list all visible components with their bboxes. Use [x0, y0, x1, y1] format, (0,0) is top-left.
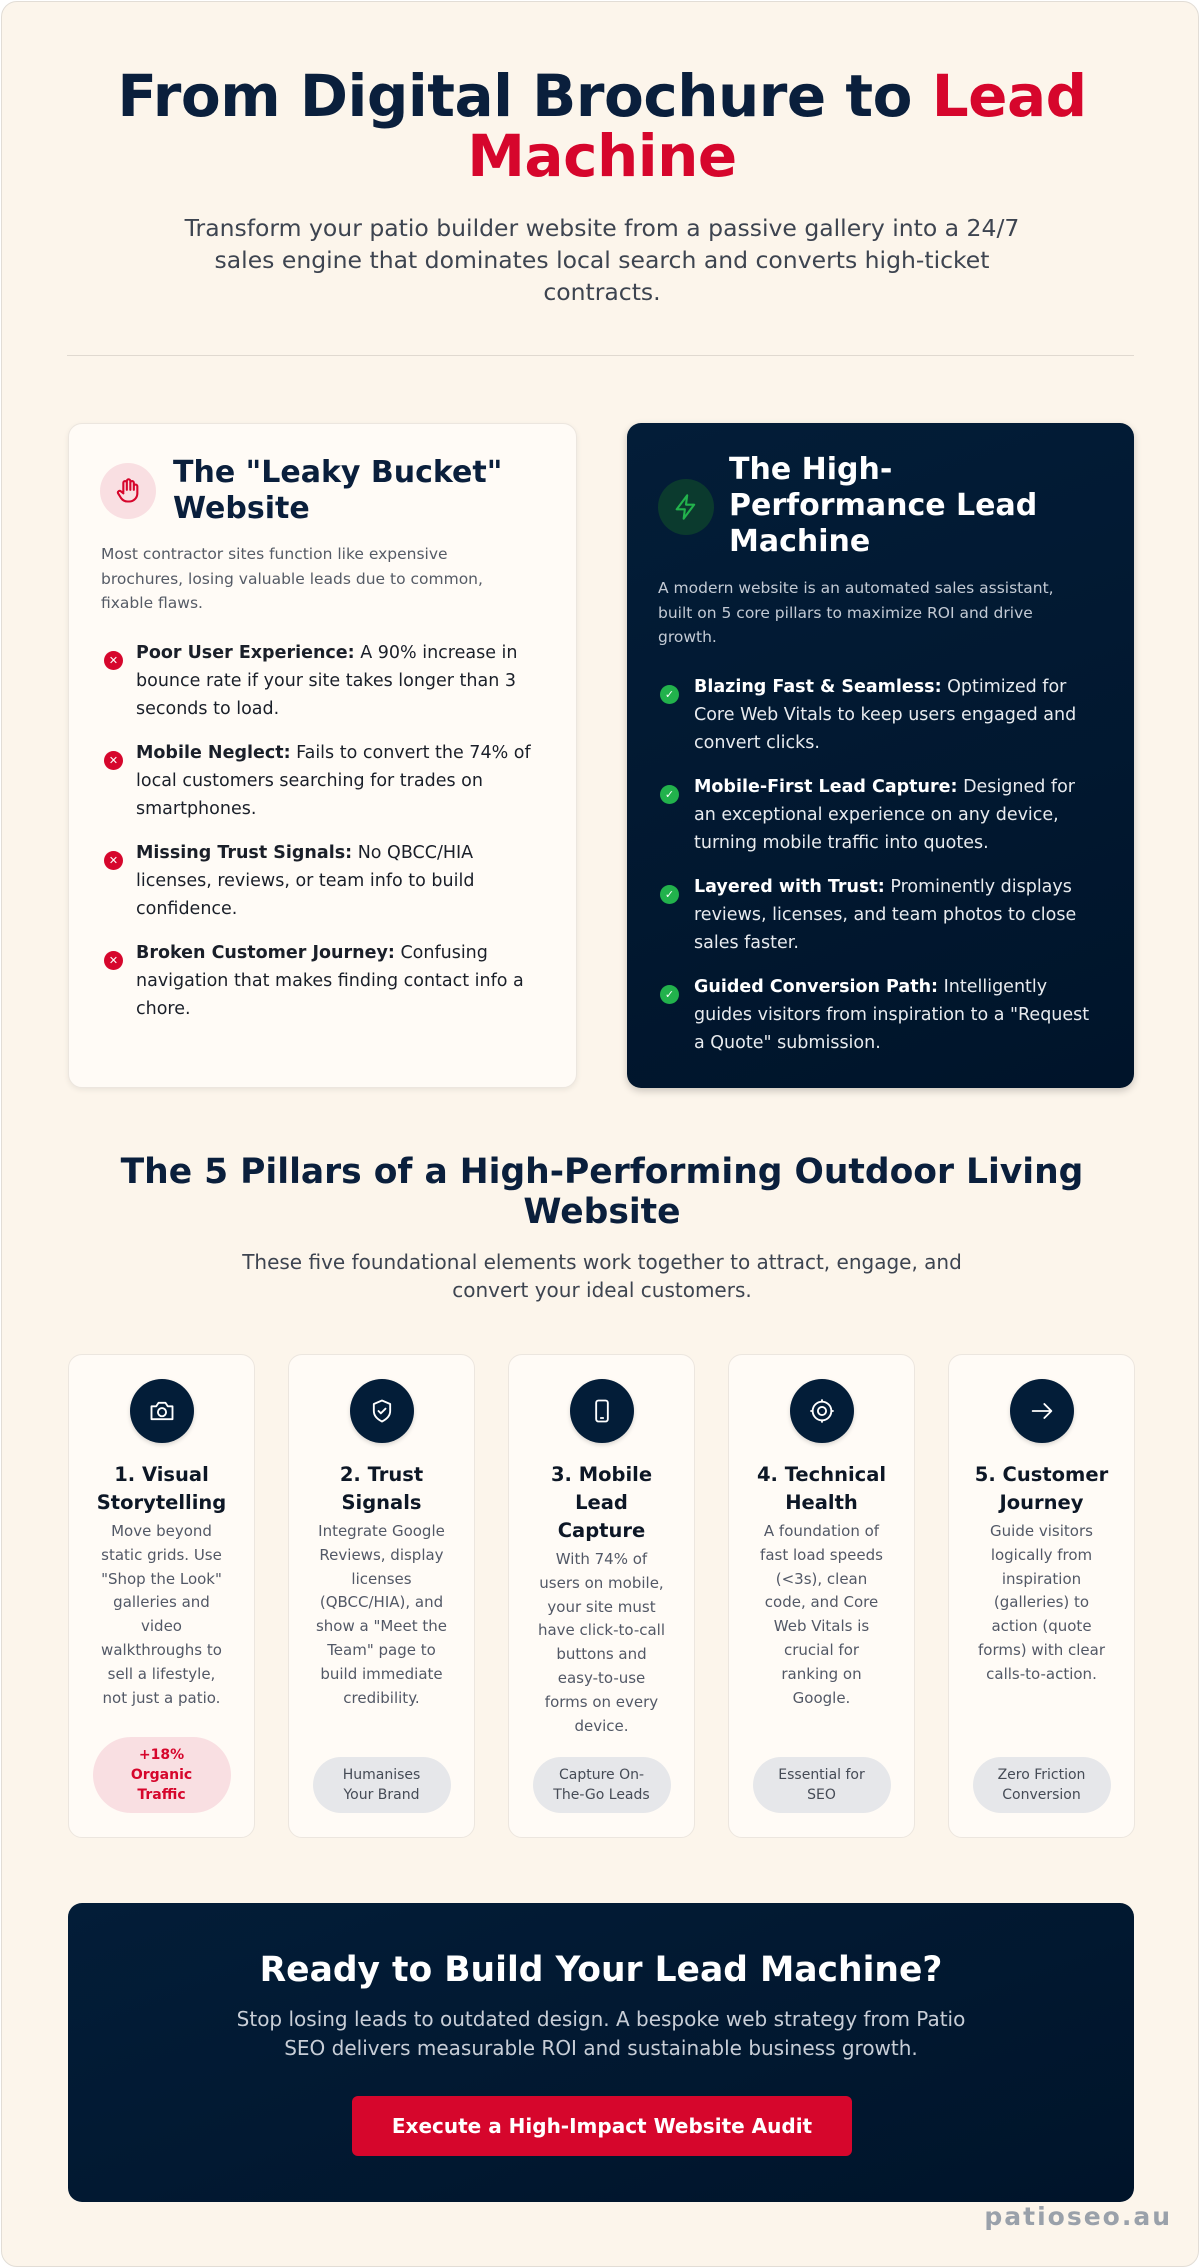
icon: camera	[130, 1379, 194, 1443]
pillar 4: A foundation of fast load speeds (<3s), clean code, and Core Web Vitals is crucial for ranking on Google.	[760, 1522, 883, 1707]
pillar 2	[288, 1354, 475, 1838]
panel: leaky bucket	[68, 423, 577, 1088]
pill: Essential for	[778, 1767, 865, 1783]
heading: The High-Performance Lead Machine	[729, 452, 1037, 559]
list: benefits: Blazing Fast & Seamless: Optimized for Core Web Vitals to keep users engaged and convert clicks.	[694, 677, 1076, 753]
icon: arrow	[1010, 1379, 1074, 1443]
subtitle: Transform your patio builder website from a passive gallery into a 24/7 sales engine that dominates local search and converts high-ticket contracts.	[185, 214, 1019, 306]
list: flaws: ✕	[109, 654, 118, 667]
pill	[312, 1757, 450, 1813]
pill	[532, 1757, 670, 1813]
list: benefits: Mobile-First Lead Capture: Designed for an exceptional experience on any device, turning mobile traffic into quotes.	[694, 777, 1075, 853]
CTA button	[352, 2096, 852, 2156]
icon: hand	[100, 463, 156, 519]
pillar 3	[508, 1354, 695, 1838]
panel: lead machine	[627, 423, 1134, 1088]
pill: Zero Friction	[998, 1767, 1085, 1783]
subheading: These five foundational elements work together to attract, engage, and convert your ideal customers.	[242, 1250, 962, 1302]
pillar 3: With 74% of users on mobile, your site must have click-to-call buttons and easy-to-use forms on every device.	[538, 1550, 665, 1735]
title: From Digital Brochure to Lead Machine	[117, 62, 1087, 190]
pill	[972, 1757, 1110, 1813]
list: benefits: ✓	[665, 888, 674, 901]
icon: phone	[570, 1379, 634, 1443]
icon: lightning	[658, 479, 714, 535]
description: A modern website is an automated sales assistant, built on 5 core pillars to maximize ROI and drive growth.	[658, 579, 1054, 646]
list: flaws: Poor User Experience: A 90% increase in bounce rate if your site takes longer than 3 seconds to load.	[136, 643, 518, 719]
list: benefits: ✓	[665, 988, 674, 1001]
icon: shield	[350, 1379, 414, 1443]
pill: Humanises	[343, 1767, 420, 1783]
pillar 3: 3. Mobile Lead Capture	[551, 1463, 652, 1542]
pillar 5	[948, 1354, 1135, 1838]
CTA heading: Ready to Build Your Lead Machine?	[260, 1950, 942, 1990]
pill: +18%: Traffic	[137, 1787, 186, 1803]
list: benefits: Layered with Trust: Prominently displays reviews, licenses, and team photos to close sales faster.	[694, 877, 1076, 953]
pill: The-Go Leads	[553, 1787, 650, 1803]
CTA panel	[68, 1903, 1134, 2202]
pillar 2: 2. Trust Signals	[340, 1463, 423, 1514]
list: flaws: ✕	[109, 854, 118, 867]
list: benefits	[660, 677, 1089, 1053]
list: flaws: ✕	[109, 754, 118, 767]
pill: +18%: +18%	[139, 1747, 184, 1763]
pillar 4: 4. Technical Health	[757, 1463, 886, 1514]
pill	[752, 1757, 890, 1813]
pillar 1	[68, 1354, 255, 1838]
list: benefits: ✓	[665, 688, 674, 701]
list: flaws: Mobile Neglect: Fails to convert the 74% of local customers searching for trades on smartphones.	[136, 743, 531, 819]
pill: Your Brand	[343, 1787, 420, 1803]
CTA text: Stop losing leads to outdated design. A bespoke web strategy from Patio SEO delivers measurable ROI and sustainable business growth.	[237, 2007, 965, 2060]
list: flaws: ✕	[109, 954, 118, 967]
pillar 5: 5. Customer Journey	[975, 1463, 1108, 1514]
pill: SEO	[807, 1787, 836, 1803]
heading: The "Leaky Bucket" Website	[173, 455, 502, 526]
list: benefits: Guided Conversion Path: Intelligently guides visitors from inspiration to a "Request a Quote" submission.	[694, 977, 1089, 1053]
pillar 2: Integrate Google Reviews, display licenses (QBCC/HIA), and show a "Meet the Team" page to build immediate credibility.	[316, 1522, 447, 1707]
description: Most contractor sites function like expensive brochures, losing valuable leads due to common, fixable flaws.	[101, 545, 483, 612]
list: flaws: Missing Trust Signals: No QBCC/HIA licenses, reviews, or team info to build confidence.	[136, 843, 474, 919]
pillar 4	[728, 1354, 915, 1838]
list: benefits: ✓	[665, 788, 674, 801]
pill: Conversion	[1002, 1787, 1081, 1803]
icon: gear	[790, 1379, 854, 1443]
footer: brand: patioseo.au	[984, 2202, 1172, 2231]
heading: 5 pillars: The 5 Pillars of a High-Performing Outdoor Living Website	[121, 1152, 1083, 1232]
pillar 5: Guide visitors logically from inspiration (galleries) to action (quote forms) with clear calls-to-action.	[978, 1522, 1105, 1683]
pillar 1: 1. Visual Storytelling	[97, 1463, 226, 1514]
pill: +18%: Organic	[131, 1767, 192, 1783]
CTA button: Execute a High-Impact Website Audit	[392, 2114, 812, 2138]
pill: +18%	[92, 1737, 230, 1813]
pillar 1: Move beyond static grids. Use "Shop the Look" galleries and video walkthroughs to sell a lifestyle, not just a patio.	[101, 1522, 222, 1707]
list: flaws	[104, 643, 531, 1019]
pill: Capture On-	[559, 1767, 644, 1783]
list: flaws: Broken Customer Journey: Confusing navigation that makes finding contact info a chore.	[136, 943, 524, 1019]
